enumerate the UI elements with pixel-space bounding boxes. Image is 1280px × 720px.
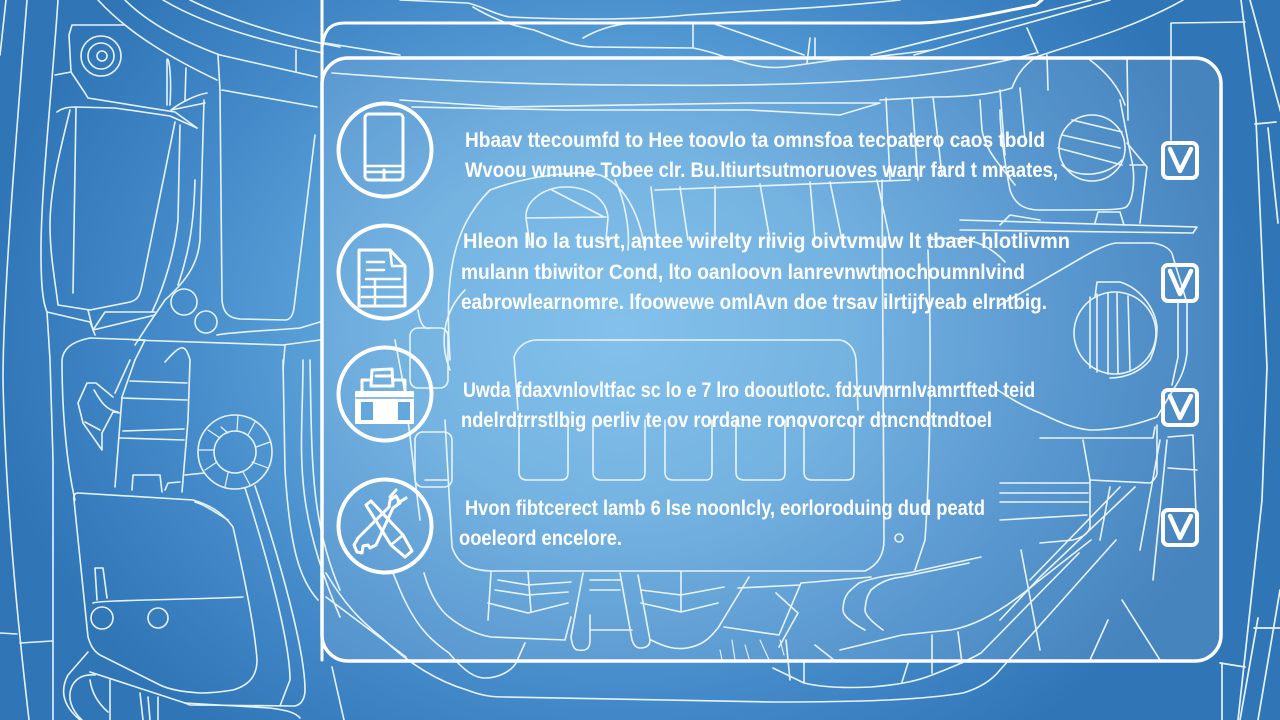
checklist text: item 3: ndelrdtrrstlbig oerliv te ov rordane ronovorcor dtncndtndtoel <box>461 409 992 432</box>
blueprint: right side of the engine bay <box>1220 0 1280 720</box>
icon: smartphone <box>338 104 432 196</box>
checklist text: item 3 <box>461 379 1035 432</box>
checklist text: item 1: Hbaav ttecoumfd to Hee toovlo ta omnsfoa tecoatero caos tbold <box>465 129 1045 152</box>
checkbox 2 <box>1163 265 1197 301</box>
icon: document <box>338 226 432 318</box>
checklist text: item 1 <box>465 129 1058 182</box>
checkbox 3 <box>1163 390 1197 425</box>
checklist text: item 2: eabrowlearnomre. lfoowewe omlAvn doe trsav ilrtijfyeab elrntbig. <box>461 291 1047 314</box>
checklist text: item 1: Wvoou wmune Tobee clr. Bu.ltiurtsutmoruoves wanr fard t mraates, <box>465 159 1058 182</box>
checklist text: item 2: mulann tbiwitor Cond, lto oanloovn lanrevnwtmochoumnlvind <box>461 261 1025 284</box>
outer frame <box>322 0 1042 660</box>
icon: crossed wrench and screwdriver <box>338 480 432 572</box>
blueprint: engine block <box>325 0 1245 720</box>
blueprint: left side of the engine bay <box>0 0 340 720</box>
checklist text: item 4: Hvon fibtcerect lamb 6 lse noonlcly, eorloroduing dud peatd <box>465 497 985 520</box>
checklist text: item 4: ooeleord encelore. <box>459 527 622 550</box>
checklist text: item 3: Uwda fdaxvnlovltfac sc lo e 7 lro dooutlotc. fdxuvnrnlvamrtfted teid <box>463 379 1035 402</box>
checklist text: item 2 <box>461 230 1070 314</box>
checkbox 4 <box>1163 510 1197 545</box>
icon: toolbox <box>338 348 432 440</box>
checklist text: item 2: Hleon llo la tusrt, antee wirelty riivig oivtvmuw lt tbaer hlotlivmn <box>463 230 1070 253</box>
main panel <box>322 58 1221 661</box>
checklist text: item 4 <box>459 497 985 550</box>
checkbox 1 <box>1163 143 1197 178</box>
